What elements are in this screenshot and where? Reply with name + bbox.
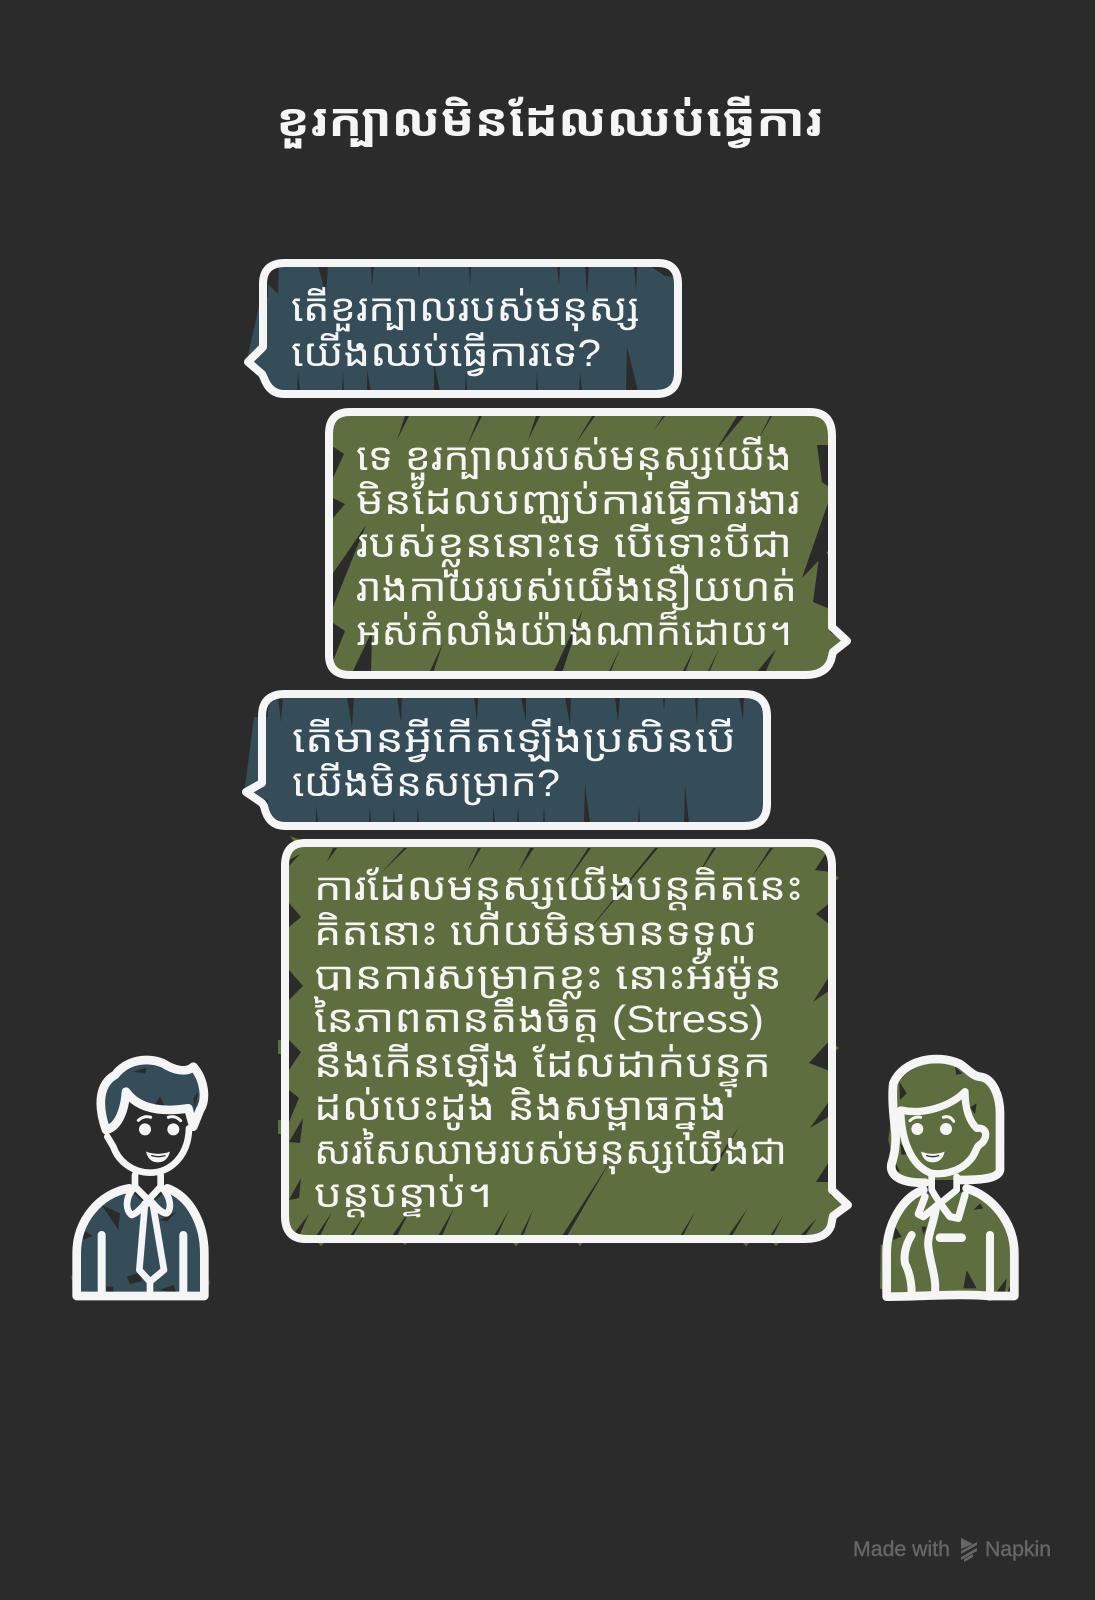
bubble text: ដល់បេះដូង និងសម្ពាធក្នុង [314,1087,727,1140]
bubble outline [329,412,847,675]
bubble outline [246,694,767,826]
hair outline [891,1059,1000,1183]
icon: man [70,1060,211,1297]
collar and shirt [932,1175,957,1203]
bubble text: សរសៃឈាមរបស់មនុស្សយើងជា [314,1129,787,1174]
bubble text: របស់ខ្លួននោះទេ បើទោះបីជា [356,523,792,577]
bubble text: រាងកាយរបស់យើងនឿយហត់ [356,564,797,611]
panel: question bubble 2 [244,694,767,826]
bubble text: យើងឈប់ធ្វើការទេ? [291,332,601,377]
bubble outline [248,263,678,394]
bubble text: នៃភាពតានតឹងចិត្ត (Stress) [314,997,764,1043]
face [107,1128,189,1173]
bubble text: តើខួរក្បាលរបស់មនុស្ស [291,287,640,331]
footer: made with napkin: Made with [853,1538,950,1561]
icon: napkin logo [961,1538,977,1562]
bubble text: បានការសម្រាកខ្លះ នោះអ័រម៉ូន [314,955,782,1000]
bubble text [356,436,800,654]
face [901,1092,986,1174]
panel: answer bubble 1 [329,412,847,675]
bubble text: ទេ ខួរក្បាលរបស់មនុស្សយើង [356,436,792,480]
panel: question bubble 1 [247,263,678,394]
bubble text: តើមានអ្វីកើតឡើងប្រសិនបើ [292,718,736,763]
bubble text: អស់កំលាំងយ៉ាងណាក៏ដោយ។ [356,611,792,654]
title: ខួរក្បាលមិនដែលឈប់ធ្វើការ [276,94,823,149]
footer: made with napkin: Napkin [985,1538,1051,1561]
footer: made with napkin [853,1538,1051,1562]
bubble text: ការដែលមនុស្សយើងបន្តគិតនេះ [314,866,803,911]
bubble text: គិតនោះ ហើយមិនមានទទួល [314,911,757,955]
panel: answer bubble 2 [278,836,848,1246]
bubble text [314,866,803,1218]
bubble text [291,287,640,377]
shirt and tie [127,1175,170,1215]
bubble text [292,718,736,806]
bubble text: យើងមិនសម្រាក? [292,762,560,806]
bubble text: បន្តបន្ទាប់។ [314,1174,492,1218]
bubble outline [285,843,848,1239]
hair outline [101,1060,204,1130]
icon: woman [880,1059,1014,1297]
bubble text: មិនដែលបញ្ឈប់ការធ្វើការងារ [356,480,800,525]
bubble text: នឹងកើនឡើង ដែលដាក់បន្ទុក [314,1042,771,1097]
